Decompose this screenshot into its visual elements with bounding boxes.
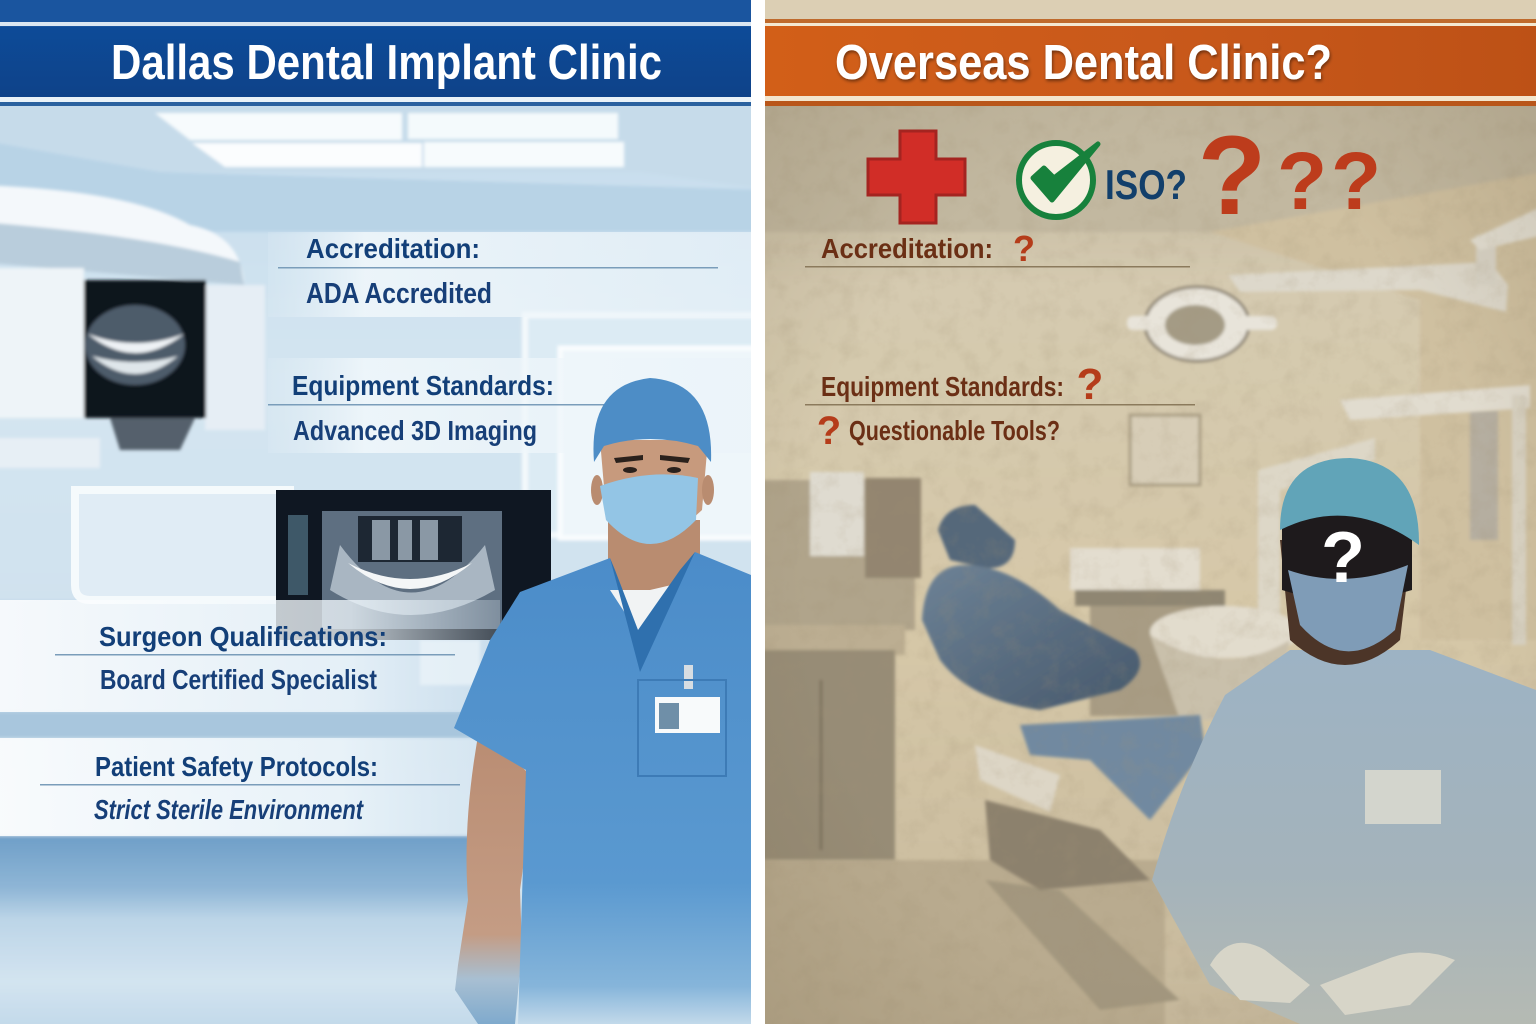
panel: overseas clinic [745,0,1536,1024]
value: Strict Sterile Environment: Strict Sterile Environment [94,794,364,825]
heading: Accreditation: Accreditation: [306,233,480,264]
unidentified surgeon [1152,458,1536,1024]
face mask [1288,565,1408,651]
icon: red cross [868,131,965,223]
clinic room background [0,100,770,1024]
value: Advanced 3D Imaging: Advanced 3D Imaging [293,415,537,446]
heading: Patient Safety Protocols: Patient Safety Protocols: [95,751,378,782]
value: Questionable Tools: Questionable Tools? [849,415,1060,446]
title: Overseas Dental Clinic?: Overseas Dental Clinic? [835,36,1332,90]
surgical cap [593,378,711,462]
dental lamp and arm [1127,200,1536,645]
header bar: Dallas [0,0,751,106]
value: ADA Accredited: ADA Accredited [306,278,492,310]
label: accreditation [805,228,1190,269]
question mark: ? [817,409,841,453]
question mark: ? [1013,228,1035,269]
heading: Accreditation: Accreditation: [821,233,993,264]
heading: Equipment Standards: Equipment Standards: [292,370,554,401]
equipment cabinets and sink [745,472,1300,860]
question mark: ? [1077,360,1103,409]
heading: Equipment Standards: Equipment Standards: [821,371,1064,402]
CT scanner machine [0,185,265,468]
label band: equipment standards [268,358,604,453]
ID badge [655,665,720,733]
surgical cap [1280,458,1419,545]
grunge texture [768,248,1528,808]
label band: surgeon qualifications [0,600,500,712]
label: equipment standards [805,360,1195,453]
face mask [600,474,698,544]
question mark on face: ? [1321,518,1365,598]
eyes and brows [614,455,690,473]
gloved hands [1210,943,1310,1003]
surgeon figure [454,378,751,1024]
silhouette face [1282,516,1412,594]
dental x-ray monitor [75,490,551,640]
label band: patient safety protocols [0,738,490,836]
worn dental chair [922,505,1205,890]
icon: question marks: ? [1277,136,1327,227]
label: ISO?: ISO? [1105,161,1187,208]
aged clinic background [745,100,1536,1024]
value: Board Certified Specialist: Board Certified Specialist [100,664,377,695]
vignette [765,106,1536,1024]
icon: question marks [1198,113,1381,238]
heading: Surgeon Qualifications: Surgeon Qualifications: [99,621,387,652]
title: Dallas Dental Implant Clinic: Dallas Dental Implant Clinic [111,36,662,90]
icon: question marks: ? [1198,113,1266,238]
icon: question marks: ? [1331,136,1381,227]
label band: accreditation [268,232,751,317]
header bar: overseas [765,0,1536,106]
panel: Dallas clinic [0,0,770,1024]
icon: green check badge with ISO [1019,143,1187,217]
